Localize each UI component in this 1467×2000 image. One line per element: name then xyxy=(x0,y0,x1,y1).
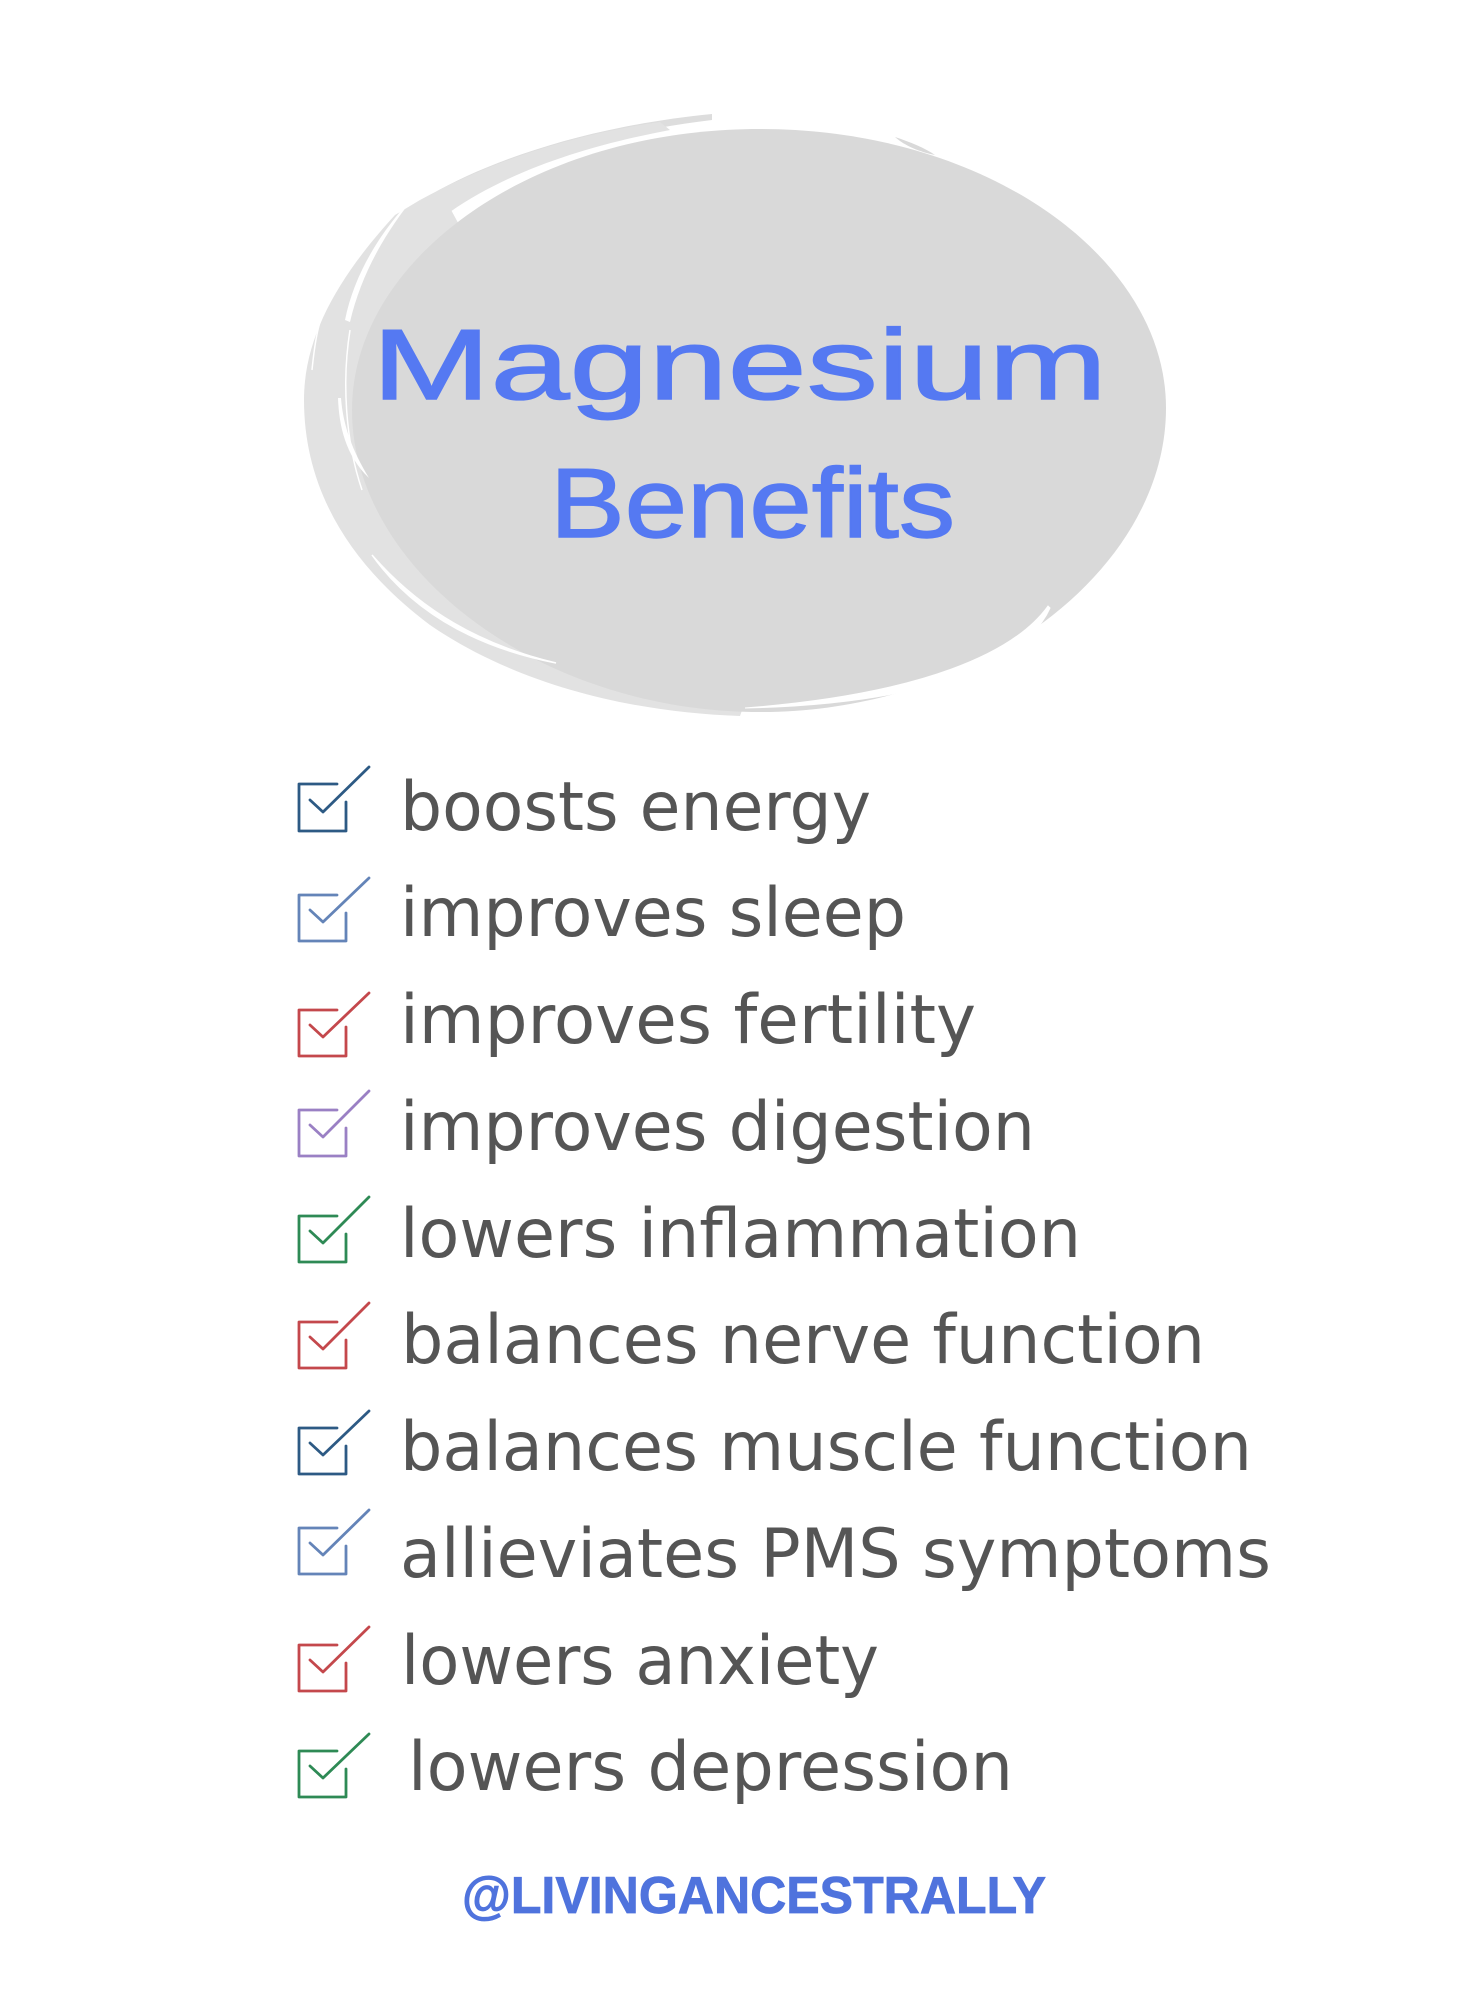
list item: boosts energy: boosts energy xyxy=(400,768,871,847)
footer handle: @LIVINGANCESTRALLY xyxy=(462,1867,1046,1925)
heading: Benefits: Benefits xyxy=(550,448,955,558)
heading: Magnesium: Magnesium xyxy=(372,309,1107,421)
list item: lowers anxiety: lowers anxiety xyxy=(401,1622,879,1701)
list item: lowers depression: lowers depression xyxy=(408,1728,1013,1807)
list item: lowers inflammation: lowers inflammation xyxy=(400,1195,1081,1274)
list item: improves fertility: improves fertility xyxy=(400,981,976,1060)
list item: balances nerve function: balances nerve function xyxy=(401,1301,1205,1380)
list item: improves digestion: improves digestion xyxy=(400,1088,1035,1167)
list item: balances muscle function: balances muscle function xyxy=(400,1408,1252,1487)
list item: allieviates PMS symptoms: allieviates PMS symptoms xyxy=(400,1515,1271,1594)
panel: brush ellipse xyxy=(304,114,1166,716)
list item: improves sleep: improves sleep xyxy=(400,874,906,953)
